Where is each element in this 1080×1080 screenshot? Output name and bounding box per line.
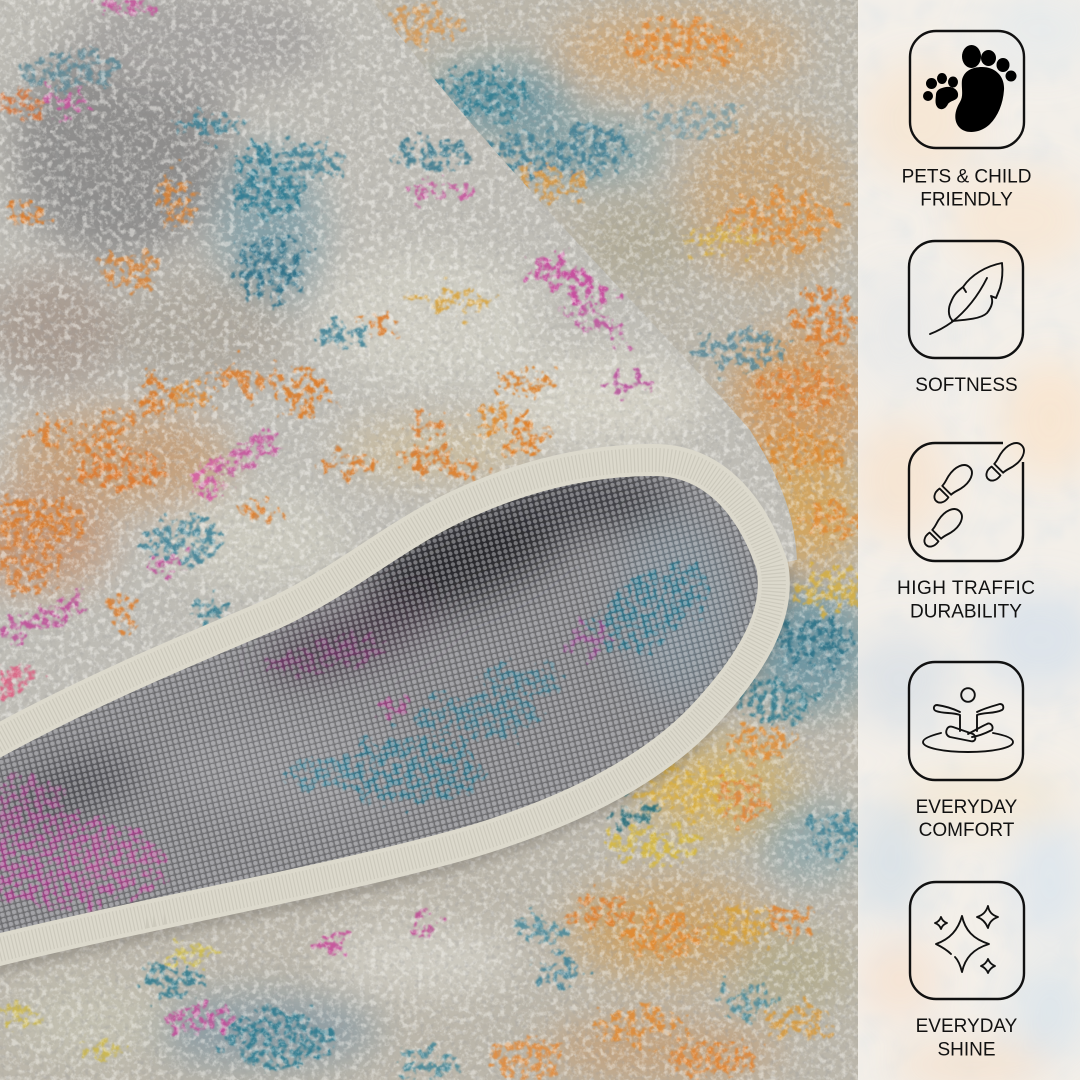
feature panel background bbox=[850, 0, 1080, 1080]
feature: everyday comfort bbox=[909, 662, 1023, 841]
icon: baby foot and paw prints bbox=[910, 31, 1024, 148]
folded rug top surface bbox=[0, 0, 797, 721]
label: pets and child friendly: PETS & CHILD bbox=[902, 166, 1031, 188]
label: everyday comfort: COMFORT bbox=[919, 820, 1015, 841]
icon: feather bbox=[909, 241, 1023, 358]
icon: seated figure on mat bbox=[909, 662, 1023, 780]
label: everyday comfort: EVERYDAY bbox=[916, 797, 1017, 818]
label: pets and child friendly: FRIENDLY bbox=[920, 190, 1013, 210]
feature: pets and child friendly bbox=[902, 31, 1031, 210]
label: high traffic durability bbox=[897, 578, 1035, 622]
feature: softness bbox=[909, 241, 1023, 396]
icon: sparkles bbox=[910, 882, 1024, 999]
rug underside backing bbox=[0, 476, 758, 933]
rug rim binding bbox=[0, 460, 774, 952]
label: everyday shine: EVERYDAY bbox=[916, 1016, 1017, 1037]
shadow under rolled rug bbox=[0, 565, 786, 968]
icon: footprints bbox=[909, 439, 1028, 561]
label: high traffic durability: HIGH TRAFFIC bbox=[897, 578, 1035, 599]
label: everyday shine: SHINE bbox=[937, 1040, 996, 1060]
label: softness: SOFTNESS bbox=[915, 375, 1018, 396]
label: high traffic durability: DURABILITY bbox=[910, 602, 1022, 622]
feature: everyday shine bbox=[910, 882, 1024, 1060]
feature: high traffic durability bbox=[897, 439, 1035, 622]
